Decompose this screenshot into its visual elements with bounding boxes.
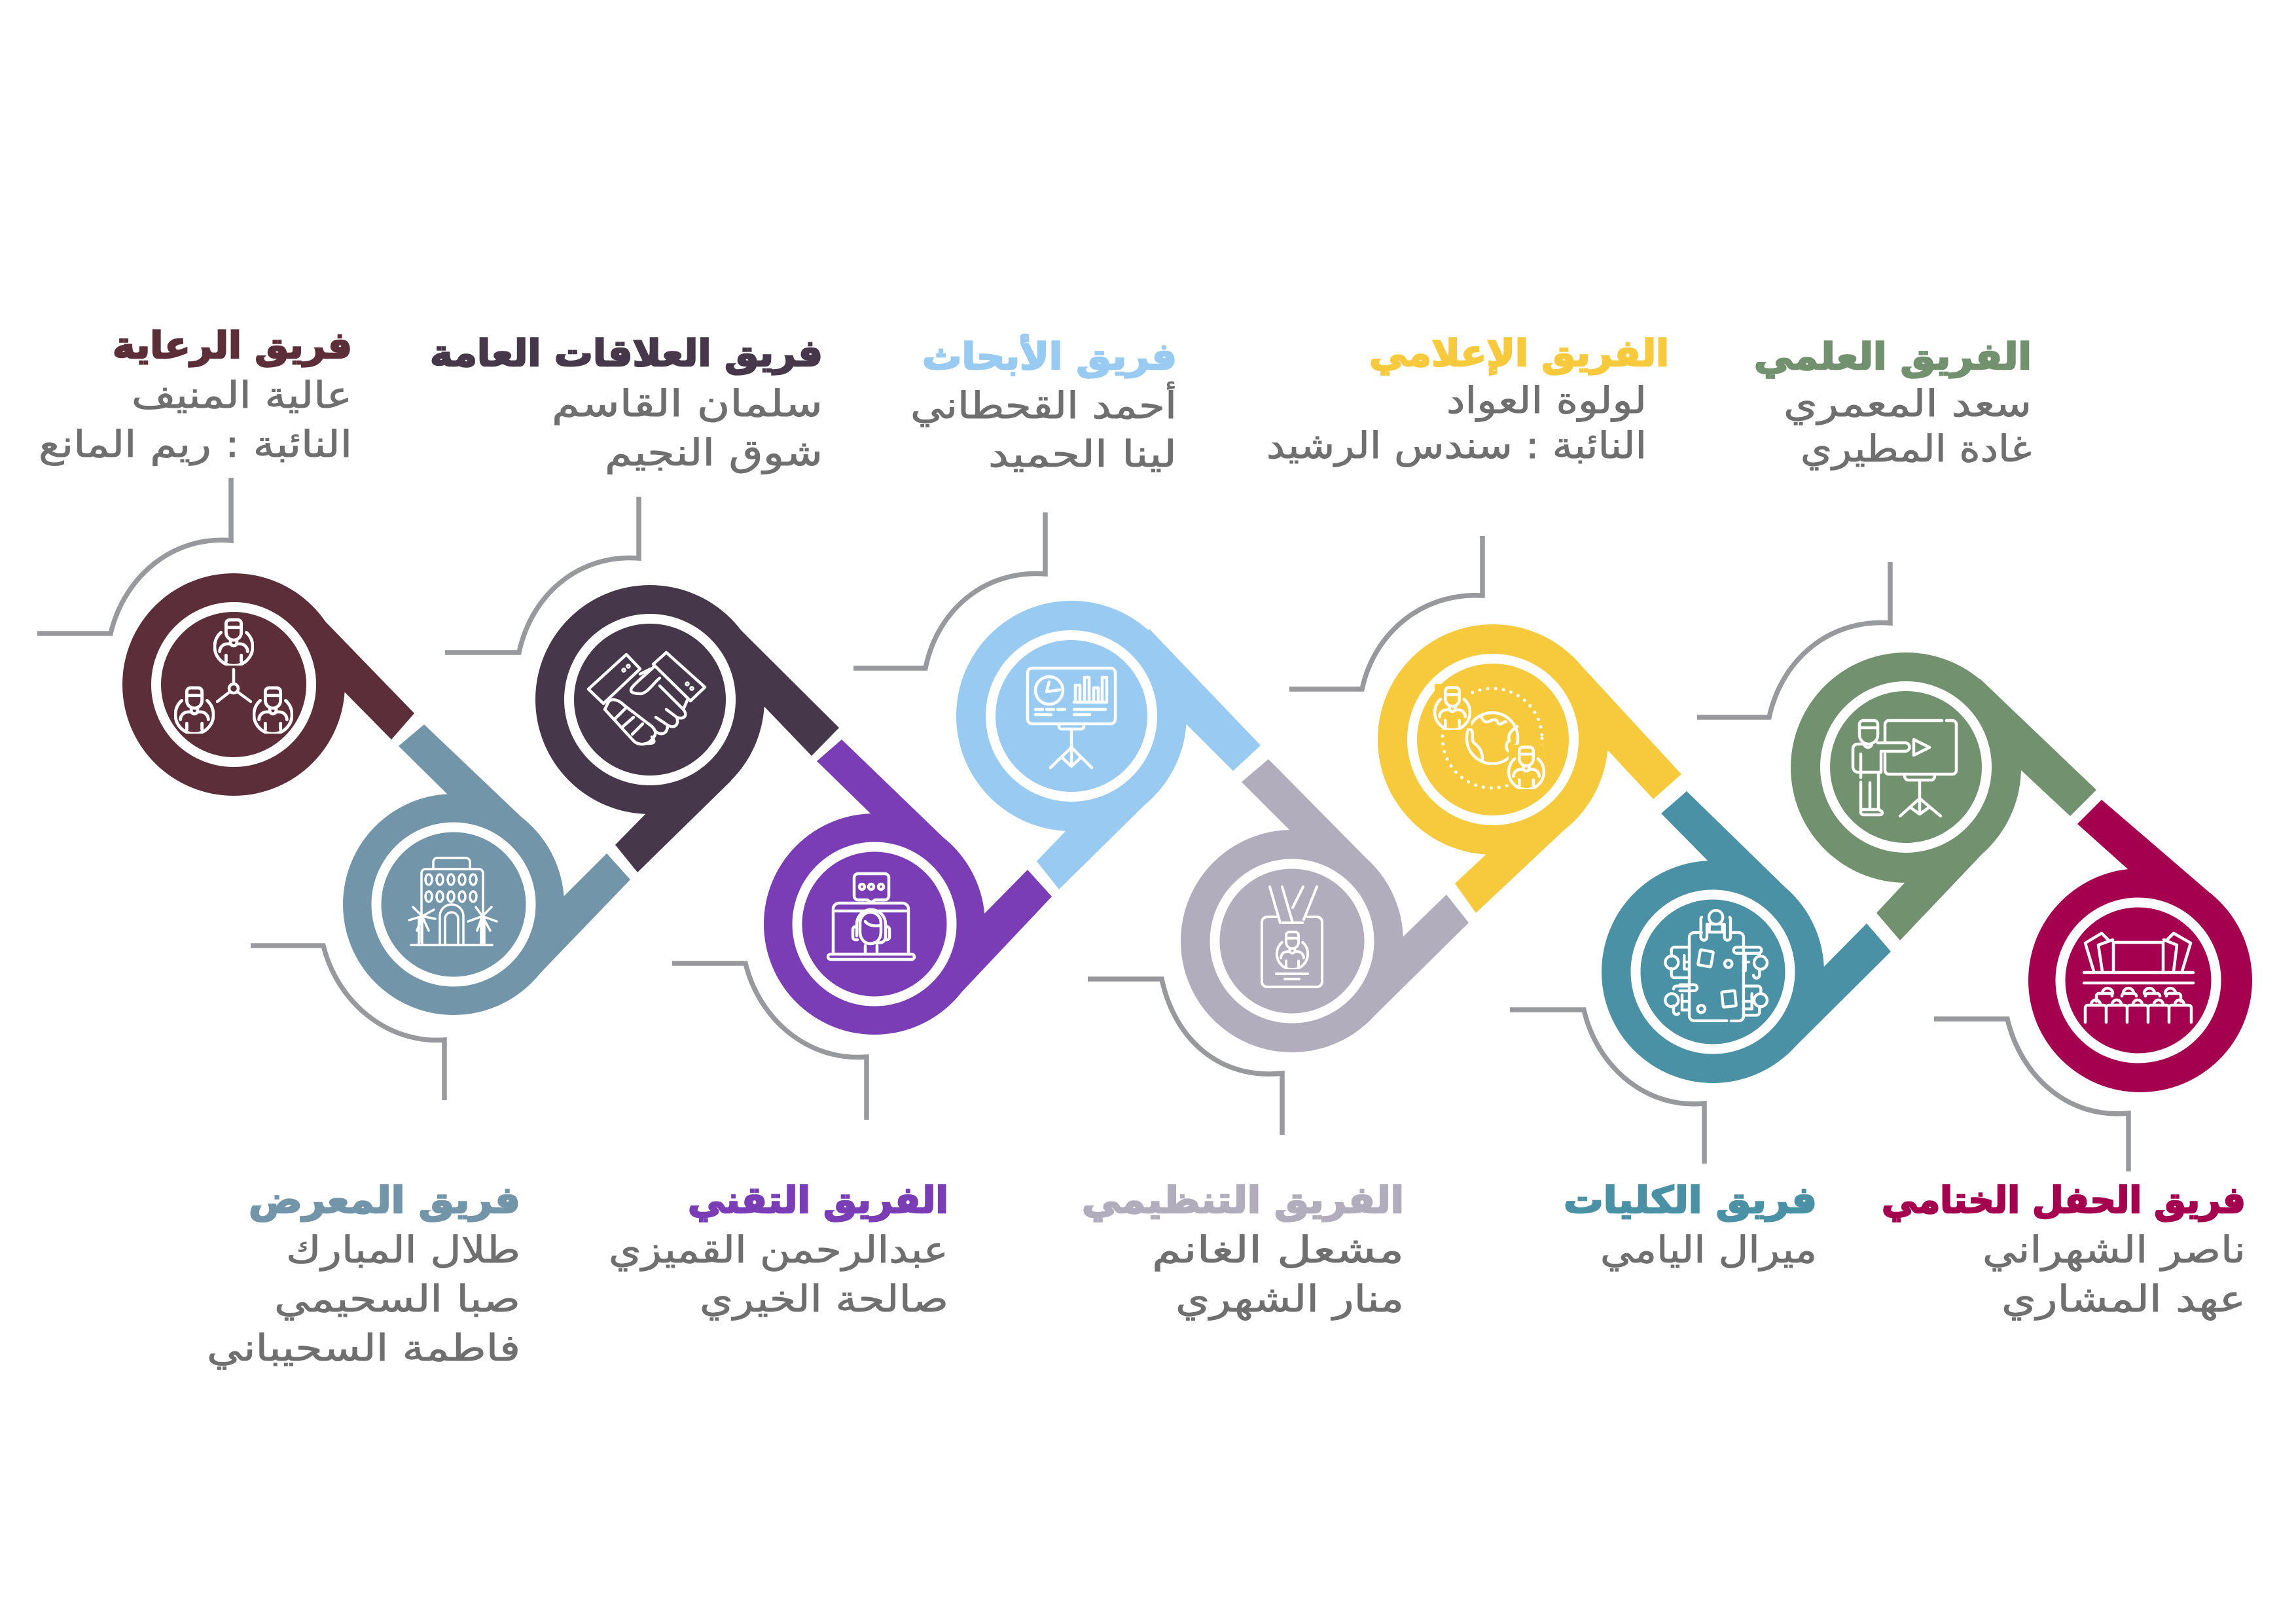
ring [569,619,730,780]
step 7: media team [1266,332,1681,913]
names [1152,1229,1404,1321]
names [1982,1229,2246,1321]
names: شوق النجيم [605,432,823,474]
leader line [1088,979,1282,1135]
names [552,383,823,474]
names: عهد المشاري [2001,1278,2246,1321]
names: النائبة : سندس الرشيد [1266,425,1647,467]
leader line [251,946,444,1100]
icon: people around a meeting table [1665,910,1767,1021]
names: مشعل الغانم [1152,1229,1404,1272]
icon: laptop with support agent [828,874,914,959]
heading: فريق الأبحاث [922,334,1177,378]
names [910,382,1177,476]
heading: فريق المعرض [249,1179,520,1222]
leader line [672,963,867,1120]
names: النائبة : ريم المانع [39,423,352,466]
names: منار الشهري [1175,1278,1404,1321]
step 10: closing ceremony team [1882,800,2252,1321]
names: عبدالرحمن القميزي [609,1229,948,1272]
ring [797,847,952,1001]
names: لولوة العواد [1446,380,1647,422]
drop shape [764,740,1052,1035]
names: أحمد القحطاني [910,382,1177,427]
ring [156,607,312,762]
leader line [853,512,1045,668]
step 4: technical team [609,740,1052,1321]
names [1266,380,1647,467]
names [39,374,352,466]
drop shape [1602,791,1891,1083]
heading: الفريق العلمي [1754,336,2032,378]
drop shape [1181,759,1469,1052]
drop shape [2028,800,2252,1092]
names: غادة المطيري [1801,428,2032,471]
names: ميرال اليامي [1600,1229,1817,1272]
drop shape [1378,624,1681,913]
names: صالحة الخيري [700,1278,948,1321]
drop shape [535,585,839,872]
icon: ID badge with lanyard [1262,887,1322,987]
icon: building with palms [409,858,497,945]
names: عالية المنيف [132,374,352,417]
icon: people around globe [1435,684,1544,789]
names: صبا السحيمي [274,1278,520,1321]
heading: الفريق الإعلامي [1369,332,1669,375]
names: سعد المعمري [1784,383,2032,425]
step 5: research team [853,334,1261,889]
leader line [1510,1010,1704,1164]
heading: الفريق التنظيمي [1082,1179,1404,1222]
ring [1825,686,1987,848]
ring [376,827,531,982]
step 3: public relations team [430,332,839,872]
step 2: exhibition team [207,724,630,1370]
heading: فريق الرعاية [113,325,352,367]
leader line [37,478,231,633]
ring [1636,895,1790,1049]
names: ناصر الشهراني [1982,1229,2246,1272]
icon: presentation board [1028,668,1115,768]
step 8: colleges team [1510,791,1891,1272]
step 9: scientific team [1697,336,2096,940]
ring [1412,658,1573,821]
leader line [1934,1019,2128,1171]
names: طلال المبارك [286,1229,520,1272]
heading: فريق الكليات [1564,1179,1817,1222]
ring [2060,902,2216,1058]
step 1: sponsorship team [37,325,414,796]
drop shape [122,573,414,796]
names [207,1229,520,1370]
ring [991,635,1152,797]
icon: stage with audience [2084,933,2193,1022]
names: فاطمة السحيباني [207,1327,520,1370]
ring [1215,864,1369,1018]
heading: الفريق التقني [688,1179,948,1222]
names: سلمان القاسم [552,383,823,425]
drop shape [956,601,1261,889]
icon: three connected people [175,620,292,734]
leader line [1289,536,1482,689]
names: لينا الحميد [988,433,1177,476]
names [609,1229,948,1321]
heading: فريق الحفل الختامي [1882,1179,2246,1222]
heading: فريق العلاقات العامة [430,332,823,375]
names [1784,383,2032,471]
drop shape [1791,652,2096,940]
step 6: organizing team [1082,759,1469,1321]
leader line [1697,562,1890,717]
leader line [445,497,639,652]
drop shape [343,724,630,1015]
icon: presenter at board [1853,721,1956,816]
icon: handshake [588,652,705,744]
